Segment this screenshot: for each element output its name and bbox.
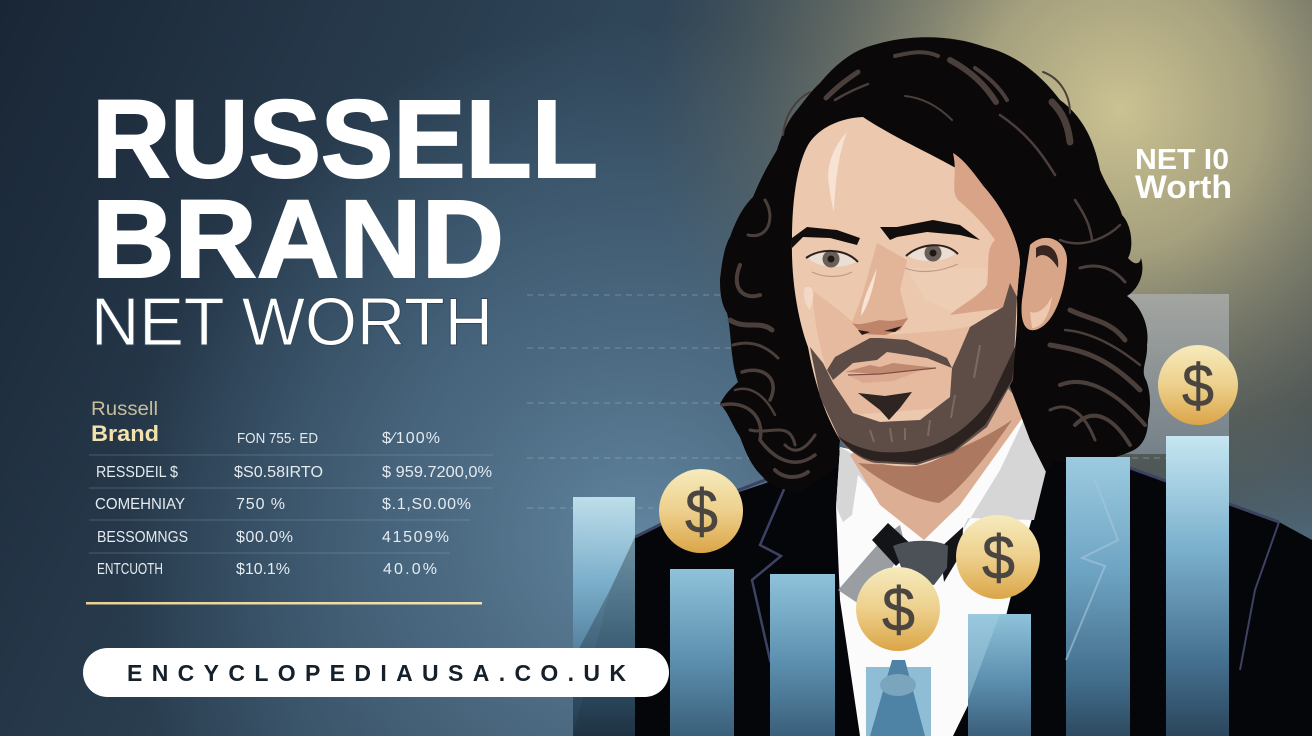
financial table xyxy=(89,399,493,578)
table rows: $ 959.7200,0% xyxy=(382,464,492,481)
gold rule xyxy=(86,602,482,604)
eyes xyxy=(806,244,958,276)
table heading: $⁄100% xyxy=(382,430,440,447)
table rows: $10.1% xyxy=(236,561,290,578)
table heading: FON 755· ED xyxy=(237,430,318,447)
chart grid lines xyxy=(527,295,1229,508)
mouth xyxy=(845,363,937,383)
ear xyxy=(1022,238,1067,330)
bar chart xyxy=(573,436,1229,736)
eyebrows xyxy=(792,220,980,248)
coin 2 xyxy=(856,567,940,651)
table heading xyxy=(91,399,440,447)
bar 5 xyxy=(968,614,1031,736)
beard xyxy=(810,283,1017,465)
grey chart panel xyxy=(1100,294,1229,454)
bar 1 xyxy=(573,497,635,736)
necktie knot xyxy=(838,523,963,610)
shirt xyxy=(836,413,1047,736)
table rows: $00.0% xyxy=(236,529,293,546)
title: RUSSELL xyxy=(92,78,598,201)
table rows: $.1,S0.00% xyxy=(382,496,471,513)
bar 4 with tie xyxy=(866,660,931,736)
coin 2: $ xyxy=(882,576,915,645)
title: NET WORTH xyxy=(91,284,493,360)
table rows xyxy=(95,464,492,578)
coin 4: $ xyxy=(1182,352,1214,419)
dollar coins xyxy=(659,345,1238,651)
table rows: 40.0% xyxy=(383,561,437,578)
bar 6 xyxy=(1066,457,1130,736)
table rows: 750 % xyxy=(236,496,285,513)
coin 3 xyxy=(956,515,1040,599)
face xyxy=(792,117,1020,466)
small net worth label: NET I0 xyxy=(1135,144,1229,176)
table rows: RESSDEIL $ xyxy=(96,464,178,481)
coin 4 xyxy=(1158,345,1238,425)
website pill: ENCYCLOPEDIAUSA.CO.UK xyxy=(127,660,626,686)
hair highlights and strands xyxy=(722,52,1145,477)
neck shadow xyxy=(858,420,1012,503)
moustache xyxy=(827,338,952,380)
goatee xyxy=(858,392,912,420)
face shading xyxy=(804,132,1020,415)
table rows: ENTCUOTH xyxy=(97,561,163,578)
coin 1 xyxy=(659,469,743,553)
bar 2 xyxy=(670,569,734,736)
table rows: $S0.58IRTO xyxy=(234,464,323,481)
table rows: BESSOMNGS xyxy=(97,529,188,546)
title: BRAND xyxy=(92,178,504,301)
coin 1: $ xyxy=(685,478,718,547)
small net worth label: Worth xyxy=(1135,169,1232,205)
website pill xyxy=(83,648,669,697)
shirt collar shadow xyxy=(836,413,1047,535)
bar 3 xyxy=(770,574,835,736)
bar 7 xyxy=(1166,436,1229,736)
table rows: 41509% xyxy=(382,529,449,546)
title xyxy=(91,78,598,360)
coin 3: $ xyxy=(982,524,1015,593)
table dividers xyxy=(89,455,493,553)
portrait of Russell Brand xyxy=(573,37,1312,736)
table heading: Russell xyxy=(91,399,158,420)
nose xyxy=(852,243,908,335)
suit jacket xyxy=(573,450,1312,736)
hair xyxy=(720,37,1150,492)
neck xyxy=(850,380,1028,540)
small net worth label xyxy=(1135,144,1232,205)
table rows: COMEHNIAY xyxy=(95,496,185,513)
table heading: Brand xyxy=(91,421,159,446)
jacket shoulder and lapel lines xyxy=(635,468,1279,736)
